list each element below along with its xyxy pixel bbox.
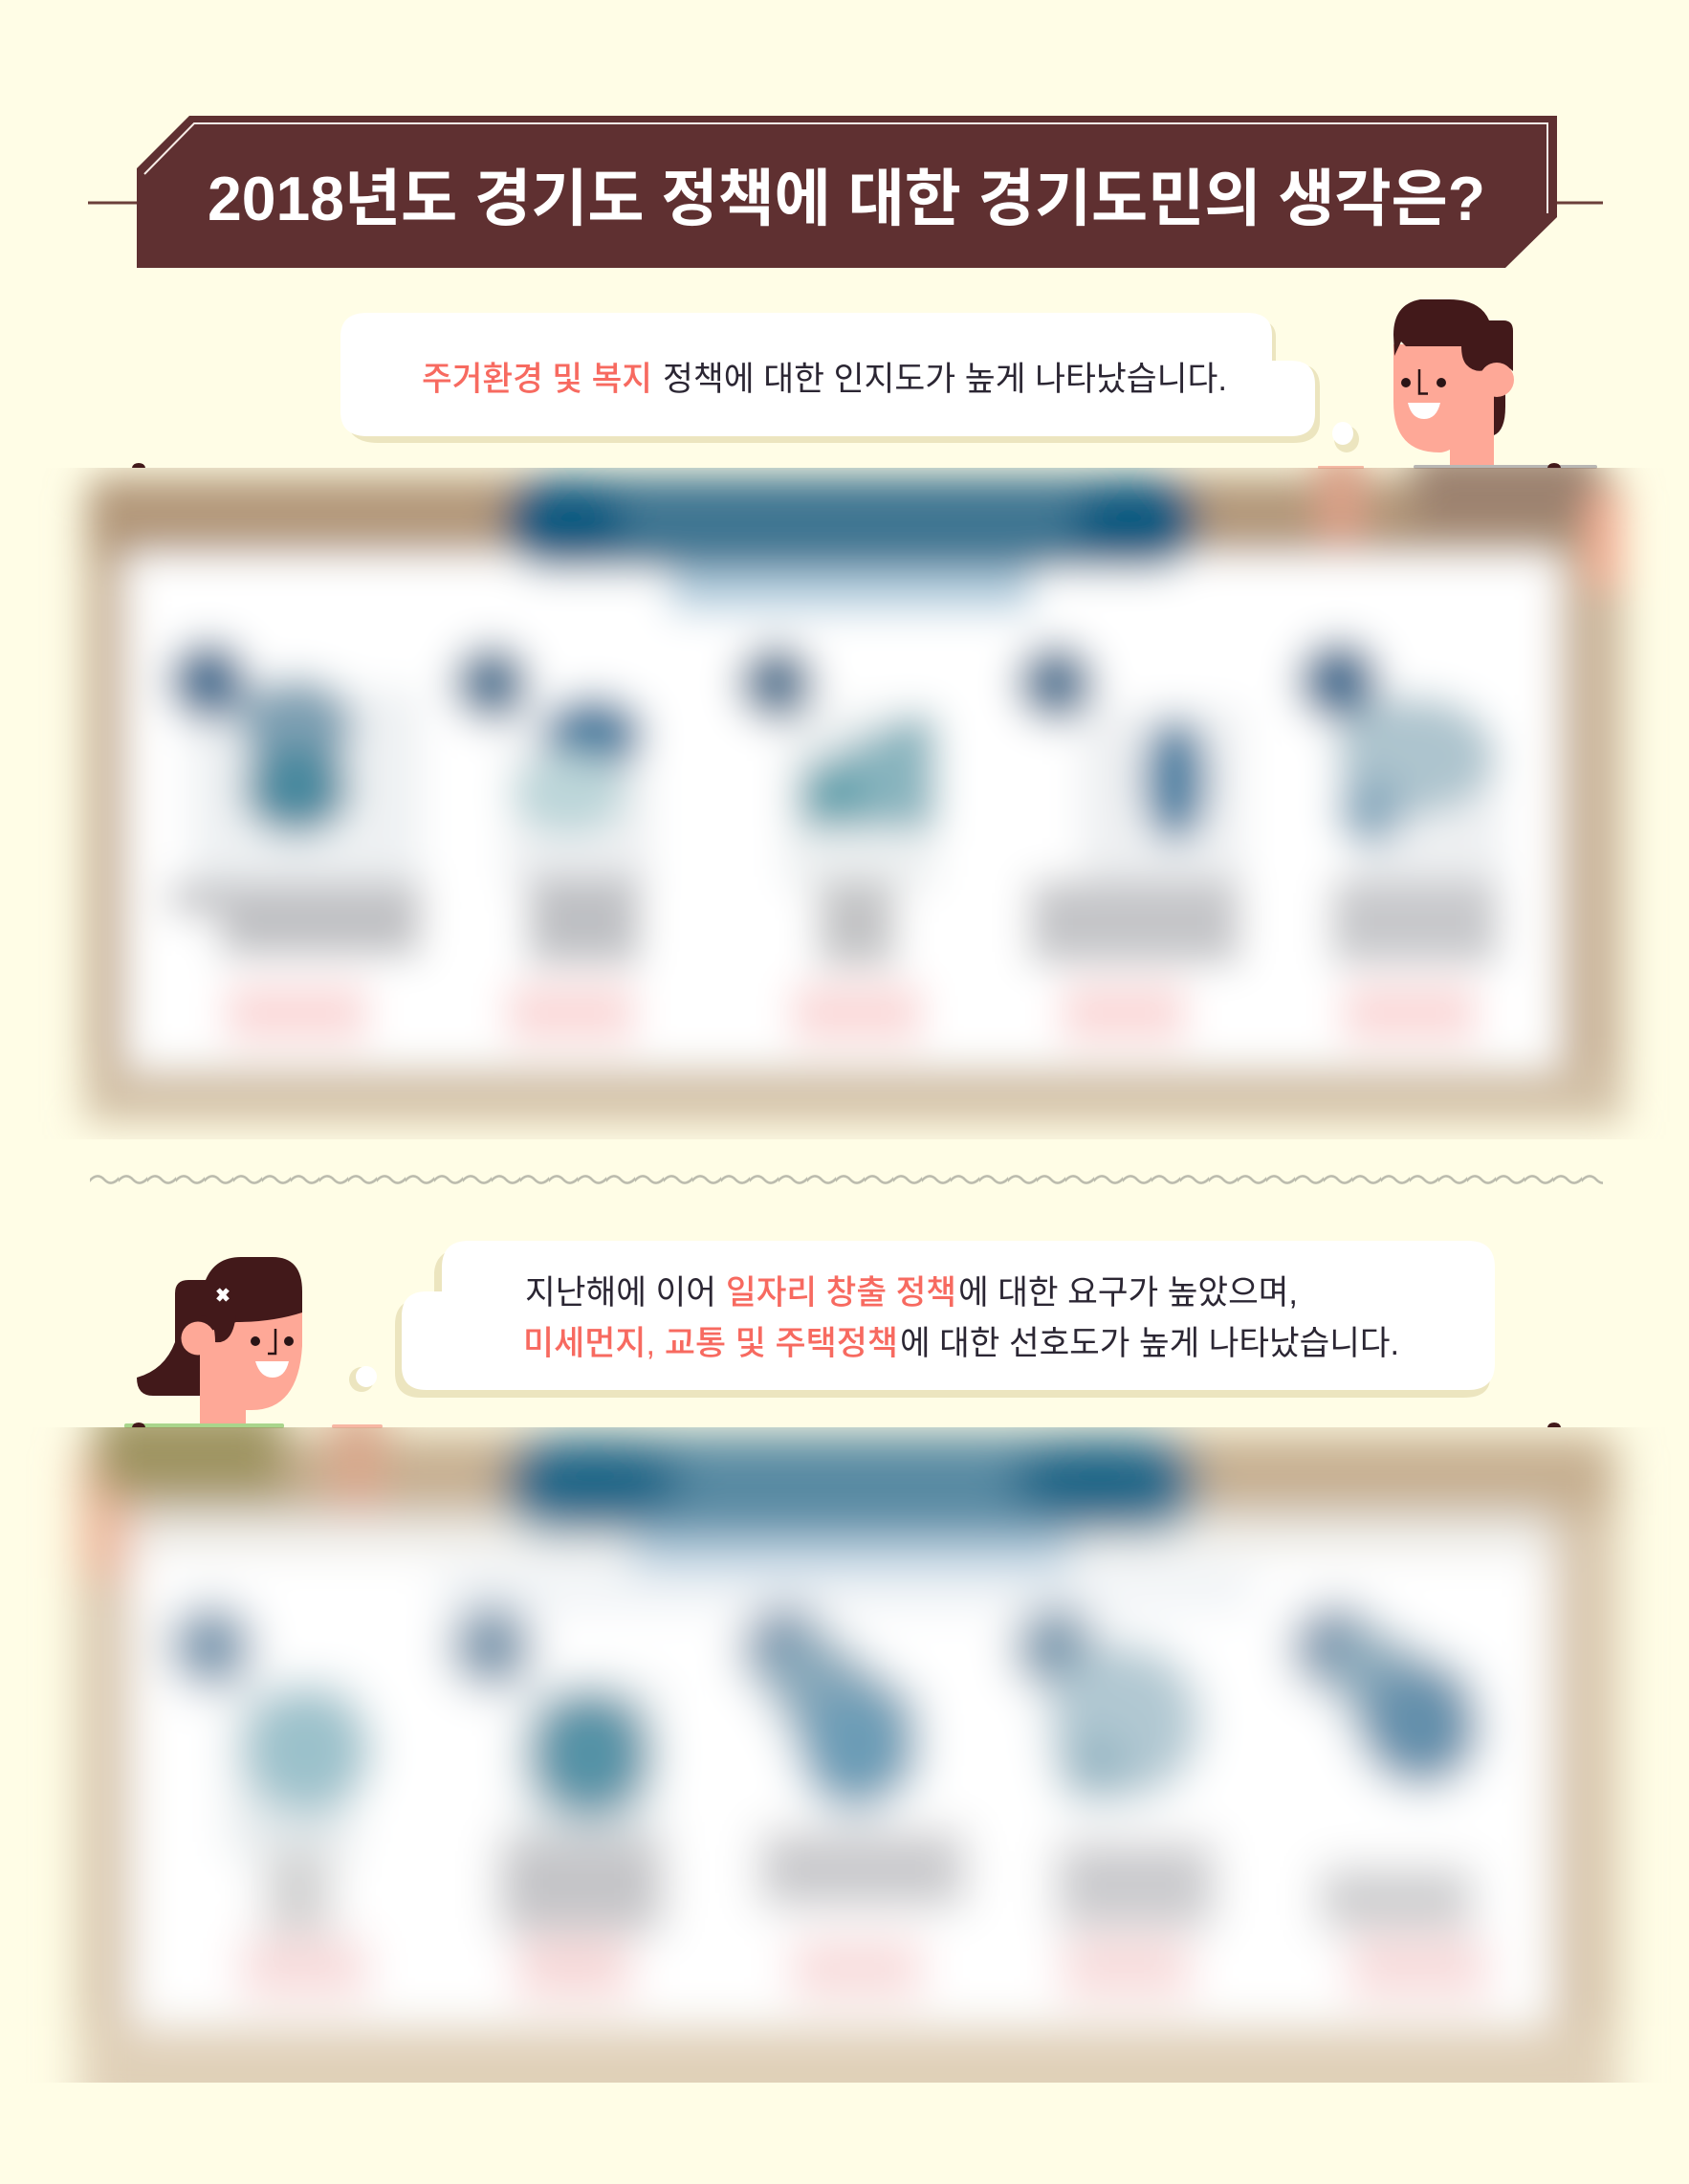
heading pill	[440, 1435, 1253, 1607]
line 1 trailing text: 에 대한 요구가 높았으며,	[958, 1274, 1298, 1312]
speech bubble: preference	[349, 1241, 1495, 1398]
panel 1: blurred policy awareness chart	[84, 450, 1624, 1122]
column 2	[450, 1604, 664, 1999]
highlighted text: 주거환경 및 복지	[422, 361, 652, 398]
column 5	[1292, 1604, 1488, 1999]
body text: 정책에 대한 인지도가 높게 나타났습니다.	[663, 361, 1227, 398]
title banner	[88, 116, 1603, 268]
title text: 2018년도 경기도 정책에 대한 경기도민의 생각은?	[208, 164, 1485, 233]
line 2 trailing text: 에 대한 선호도가 높게 나타났습니다.	[900, 1325, 1399, 1362]
line 1 lead text: 지난해에 이어	[525, 1274, 716, 1312]
character: man	[1393, 299, 1514, 469]
panel 2: blurred policy preference chart	[78, 1406, 1618, 2124]
wavy divider	[90, 1173, 1603, 1186]
frame	[84, 450, 1624, 1122]
line 2 highlighted text: 미세먼지, 교통 및 주택정책	[523, 1325, 898, 1362]
column 3	[741, 1606, 965, 1999]
column 1	[168, 641, 423, 1043]
column 5	[1298, 640, 1502, 1043]
column 4	[1014, 1606, 1215, 1999]
column 2	[453, 645, 650, 1043]
frame	[78, 1406, 1618, 2124]
marks above panel 1	[132, 463, 1597, 469]
column 3	[738, 645, 937, 1043]
heading pill	[502, 476, 1198, 612]
column 4	[1017, 644, 1243, 1043]
marks above panel 2	[124, 1423, 1561, 1428]
speech bubble: awareness	[340, 313, 1359, 452]
column 1	[169, 1604, 372, 1999]
character: woman	[137, 1257, 302, 1426]
hair clip	[218, 1290, 228, 1300]
line 1 highlighted text: 일자리 창출 정책	[726, 1274, 956, 1312]
